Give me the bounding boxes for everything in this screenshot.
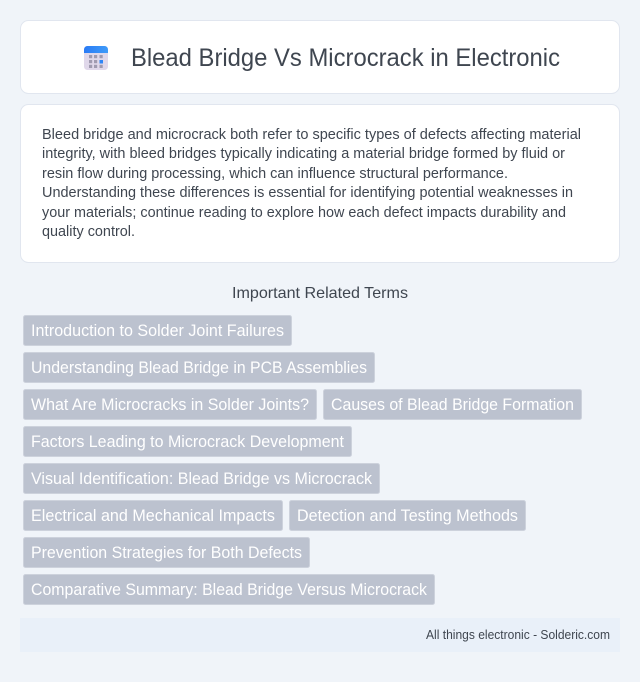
- tag: electrical and mechanical: Electrical and Mechanical Impacts: [31, 507, 275, 525]
- tag: detection: Detection and Testing Methods: [297, 507, 518, 525]
- tag: factors: [24, 426, 352, 456]
- intro paragraph: integrity, with bleed bridges typically indicating a material bridge formed by fluid or: [42, 146, 565, 162]
- panel: title header: [20, 20, 620, 94]
- tag: visual identification: Visual Identification: Blead Bridge vs Microcrack: [31, 470, 373, 488]
- title: Blead Bridge Vs Microcrack in Electronic: [131, 44, 560, 72]
- tag: introduction: [24, 316, 292, 346]
- intro paragraph: Understanding these differences is essential for identifying potential weaknesses in: [42, 185, 573, 201]
- tag: electrical and mechanical: [24, 500, 282, 530]
- tag: factors: Factors Leading to Microcrack Development: [31, 433, 344, 451]
- heading: important related terms: Important Related Terms: [232, 285, 408, 302]
- footer: [20, 618, 620, 652]
- tag: what are microcracks: [24, 390, 316, 420]
- tag: understanding blead bridge: [24, 352, 374, 382]
- tag: comparative summary: Comparative Summary: Blead Bridge Versus Microcrack: [31, 581, 428, 599]
- icon: calendar: [84, 46, 108, 70]
- intro paragraph: resin flow during processing, which can influence structural performance.: [42, 166, 508, 182]
- tag: comparative summary: [24, 574, 434, 604]
- intro paragraph: Bleed bridge and microcrack both refer to specific types of defects affecting material: [42, 127, 581, 143]
- intro paragraph: [42, 127, 581, 240]
- tag: prevention: Prevention Strategies for Both Defects: [31, 544, 302, 562]
- tag: detection: [290, 500, 526, 530]
- intro paragraph: quality control.: [42, 224, 135, 240]
- tag: prevention: [24, 538, 310, 568]
- tag: visual identification: [24, 464, 380, 494]
- tag: what are microcracks: What Are Microcracks in Solder Joints?: [31, 396, 309, 414]
- tag: understanding blead bridge: Understanding Blead Bridge in PCB Assemblies: [31, 359, 367, 377]
- tag: introduction: Introduction to Solder Joint Failures: [31, 322, 284, 340]
- footer: All things electronic - Solderic.com: [426, 628, 610, 642]
- panel: intro text: [20, 104, 620, 262]
- tag: causes: [324, 390, 582, 420]
- intro paragraph: your materials; continue reading to explore how each defect impacts durability and: [42, 205, 566, 221]
- tag: causes: Causes of Blead Bridge Formation: [331, 396, 574, 414]
